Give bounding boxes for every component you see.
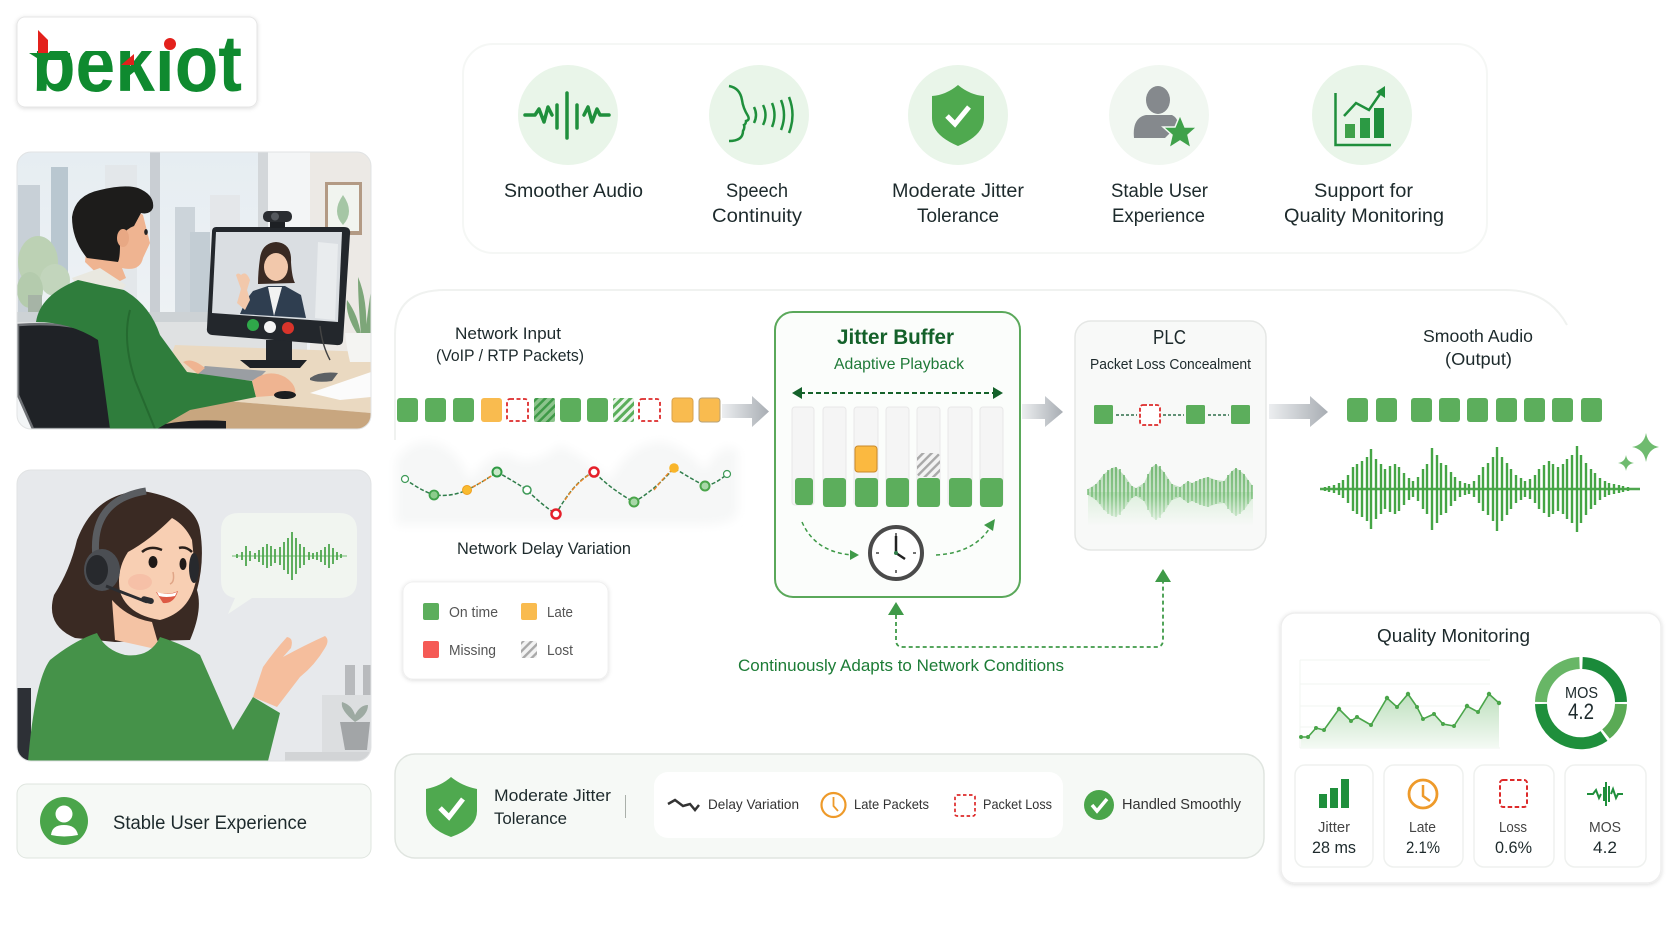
logo k accent <box>121 54 134 65</box>
benefit: moderate jitter tolerance: Moderate Jitter <box>892 181 1025 202</box>
legend: On time <box>449 605 498 621</box>
MOS donut <box>1541 663 1621 743</box>
subheading: Packet Loss Concealment <box>1090 356 1252 373</box>
benefit: moderate jitter tolerance <box>892 65 1025 227</box>
benefit: smoother audio <box>504 65 643 202</box>
arrow <box>1022 396 1063 427</box>
output waveform <box>1320 446 1640 532</box>
heading: Jitter Buffer <box>837 326 954 349</box>
stable user experience band <box>17 784 371 858</box>
legend: Late <box>547 605 573 621</box>
panel: quality monitoring <box>1281 613 1661 883</box>
delay variation <box>668 796 799 812</box>
heading <box>436 324 584 365</box>
trend chart <box>1299 660 1501 748</box>
legend: Missing <box>449 643 496 659</box>
sweater <box>28 633 280 761</box>
headset <box>84 491 199 605</box>
conditions pill <box>654 772 1063 838</box>
sparkles <box>1618 433 1659 471</box>
benefit: moderate jitter tolerance: Tolerance <box>917 206 999 227</box>
illustration: woman with headset <box>17 470 371 762</box>
lost packet <box>917 453 940 477</box>
subheading: Adaptive Playback <box>834 356 965 373</box>
packet loss <box>955 795 1052 816</box>
benefit: stable user experience: Stable User <box>1111 181 1209 202</box>
reconstructed waveform <box>1088 464 1253 526</box>
heading: (Output) <box>1445 349 1512 369</box>
legend <box>403 582 608 679</box>
metric: late <box>1384 765 1463 867</box>
face <box>119 518 196 620</box>
picture frame <box>325 182 362 235</box>
benefit: stable user experience: Experience <box>1112 206 1205 227</box>
label: Tolerance <box>494 809 567 828</box>
metric: loss <box>1474 765 1554 867</box>
late packets <box>822 793 929 817</box>
feedback loop arrows <box>888 569 1171 647</box>
heading: Smooth Audio <box>1423 326 1533 346</box>
buffer slots <box>792 407 1003 507</box>
heading: (VoIP / RTP Packets) <box>436 346 584 365</box>
peripherals <box>195 326 371 400</box>
benefit: smoother audio: Smoother Audio <box>504 181 643 202</box>
panel: jitter buffer <box>775 312 1020 597</box>
metric: loss: 0.6% <box>1495 838 1532 857</box>
benefit: speech continuity: Speech <box>726 181 788 202</box>
metric: jitter: Jitter <box>1318 819 1350 836</box>
arrow <box>1269 396 1328 427</box>
logo bar <box>29 53 70 60</box>
monitor <box>207 211 350 368</box>
arrow <box>722 396 769 427</box>
metric: jitter: 28 ms <box>1312 838 1356 857</box>
icon: shield <box>426 777 477 837</box>
label: Stable User Experience <box>113 813 307 834</box>
benefit: support for quality monitoring: Support for <box>1314 181 1414 202</box>
late packets: Late Packets <box>854 796 929 812</box>
metric: loss: Loss <box>1499 819 1527 836</box>
chart caption: Network Delay Variation <box>457 539 631 558</box>
handled smoothly <box>1084 790 1242 820</box>
heading <box>1423 326 1533 369</box>
handled smoothly: Handled Smoothly <box>1122 797 1242 813</box>
output section <box>1320 326 1659 532</box>
plant <box>345 277 371 362</box>
legend: Lost <box>547 643 573 659</box>
benefit: speech continuity: Continuity <box>712 206 803 227</box>
hair <box>52 491 202 642</box>
clock <box>870 527 922 579</box>
concealment packets <box>1094 405 1250 425</box>
logo red accent <box>38 30 48 53</box>
adaptive arrows <box>802 519 995 560</box>
logo dot <box>164 38 176 50</box>
label: Moderate Jitter <box>494 786 611 805</box>
icon: user <box>40 797 88 845</box>
MOS donut: 4.2 <box>1568 699 1594 724</box>
heading: Network Input <box>455 324 561 343</box>
logo card <box>17 17 257 108</box>
double arrow <box>792 387 1003 399</box>
heading: PLC <box>1153 327 1186 349</box>
man <box>36 186 296 429</box>
label <box>494 786 611 828</box>
benefit: stable user experience <box>1109 65 1209 227</box>
MOS donut: MOS <box>1565 685 1598 702</box>
output packets <box>1347 398 1602 422</box>
metric: mos: 4.2 <box>1593 838 1617 857</box>
webcam <box>263 211 292 228</box>
chair <box>18 322 110 428</box>
moderate jitter tolerance band <box>395 754 1264 858</box>
main flow outline <box>395 290 1567 440</box>
metric: mos: MOS <box>1589 819 1621 836</box>
illustration border <box>17 152 371 761</box>
panel: benefits <box>463 44 1487 253</box>
packet loss: Packet Loss <box>983 796 1052 812</box>
metric: mos <box>1565 765 1646 867</box>
logo wordmark: bekiot <box>32 19 242 108</box>
metric: late: 2.1% <box>1406 838 1440 857</box>
illustration: man on a video call <box>17 152 371 429</box>
benefit: support for quality monitoring <box>1284 65 1444 227</box>
heading: Quality Monitoring <box>1377 625 1530 646</box>
delay variation chart <box>396 442 738 525</box>
delay variation: Delay Variation <box>708 796 799 812</box>
panel: packet loss concealment <box>1075 321 1266 550</box>
metric: late: Late <box>1409 819 1436 836</box>
late packet <box>855 446 877 472</box>
remote participant <box>236 242 306 318</box>
feedback caption: Continuously Adapts to Network Conditions <box>738 656 1064 675</box>
benefit: speech continuity <box>709 65 809 227</box>
raised hand <box>253 636 328 707</box>
network input section <box>396 324 769 558</box>
metric: jitter <box>1295 765 1373 867</box>
speech bubble with waveform <box>221 513 357 614</box>
call buttons <box>247 319 294 334</box>
desk <box>155 345 371 429</box>
packet stream <box>397 398 720 422</box>
benefit: support for quality monitoring: Quality Monitoring <box>1284 206 1444 227</box>
